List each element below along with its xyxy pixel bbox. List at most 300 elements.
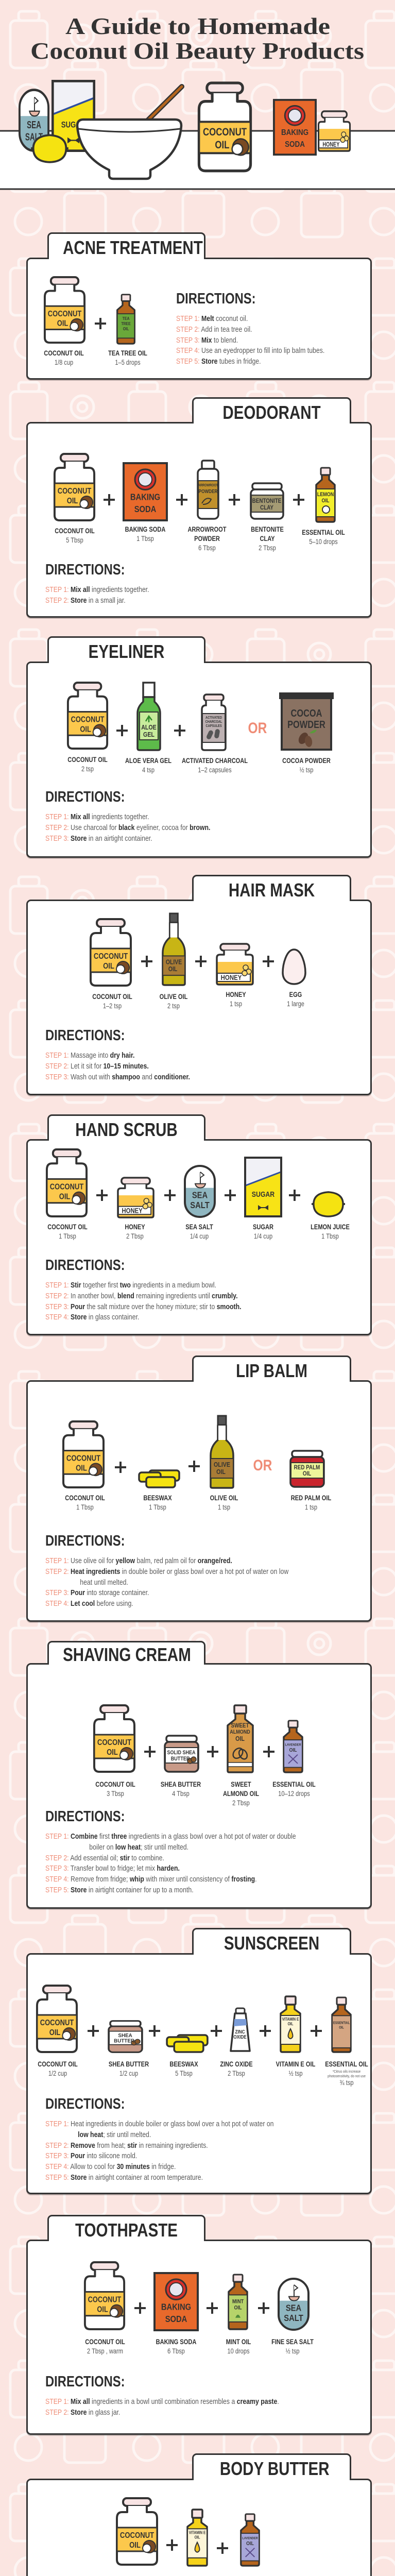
label: bentonite clay: 2 Tbsp bbox=[259, 544, 276, 552]
label: honey: 1 tsp bbox=[230, 1000, 242, 1008]
icon: shea butter: BUTTER bbox=[171, 1756, 190, 1762]
icon: sweet almond oil: SWEET bbox=[231, 1722, 249, 1729]
directions: low heat; stir until melted. bbox=[78, 2130, 151, 2139]
label: coconut oil: 5 Tbsp bbox=[66, 536, 83, 544]
label: coconut oil: COCONUT OIL bbox=[65, 1494, 105, 1502]
icon: coconut oil jar: OIL bbox=[103, 962, 114, 971]
icon: tea tree oil bbox=[116, 294, 135, 345]
icon: sea salt bbox=[19, 89, 49, 152]
icon: coconut oil jar: COCONUT bbox=[48, 310, 81, 318]
icon: sweet almond oil bbox=[226, 1704, 255, 1773]
label: honey: 2 Tbsp bbox=[126, 1232, 144, 1240]
label: arrowroot powder: ARROWROOT bbox=[187, 526, 227, 533]
icon: vitamin e oil: OIL bbox=[195, 2535, 200, 2540]
directions: STEP 4: Use an eyedropper to fill into lip balm tubes. bbox=[176, 346, 324, 355]
icon: sugar: SUGAR bbox=[252, 1190, 274, 1198]
label: red palm oil: 1 tsp bbox=[305, 1503, 317, 1511]
plus bbox=[141, 956, 152, 967]
label: coconut oil: COCONUT OIL bbox=[92, 993, 132, 1001]
label: coconut oil: 2 tsp bbox=[81, 765, 94, 773]
plus bbox=[258, 2302, 269, 2314]
icon: olive oil: OLIVE bbox=[214, 1461, 230, 1468]
icon: red palm oil: OIL bbox=[303, 1470, 311, 1477]
directions: STEP 2: In another bowl, blend remaining ingredients until crumbly. bbox=[45, 1292, 238, 1300]
panel: lip balm bbox=[0, 1355, 395, 1622]
directions: STEP 3: Pour into storage container. bbox=[45, 1588, 149, 1597]
icon: beeswax bbox=[164, 2033, 211, 2053]
directions: DIRECTIONS: bbox=[45, 1257, 125, 1274]
icon: spoon bbox=[135, 87, 182, 133]
icon: red palm oil: RED PALM bbox=[294, 1464, 320, 1471]
icon: bentonite clay: CLAY bbox=[260, 504, 274, 511]
tab heading: eyeliner: EYELINER bbox=[89, 641, 164, 662]
icon: vitamin e oil: OIL bbox=[288, 2021, 294, 2026]
directions bbox=[45, 789, 210, 843]
label: coconut oil: 1 Tbsp bbox=[76, 1503, 94, 1511]
icon: aloe vera gel: GEL bbox=[143, 731, 154, 738]
plus bbox=[174, 725, 185, 736]
icon: coconut oil jar bbox=[61, 1420, 106, 1489]
icon: honey bbox=[317, 110, 351, 152]
plus bbox=[195, 956, 207, 967]
icon: lemon bbox=[31, 134, 68, 163]
icon: sea salt: SALT bbox=[25, 131, 43, 143]
directions: STEP 5: Store tubes in fridge. bbox=[176, 357, 261, 366]
directions: STEP 3: Transfer bowl to fridge; let mix harden. bbox=[45, 1864, 180, 1873]
icon: sweet almond oil: OIL bbox=[235, 1735, 245, 1742]
tab heading: toothpaste: TOOTHPASTE bbox=[75, 2219, 178, 2241]
label: olive oil bbox=[160, 992, 187, 1011]
label: sea salt bbox=[185, 1223, 213, 1241]
icon: sugar: SUGAR bbox=[61, 120, 85, 130]
directions bbox=[45, 562, 149, 605]
directions: boiler on low heat; stir until melted. bbox=[89, 1843, 188, 1852]
icon: honey bbox=[216, 943, 254, 986]
icon: zinc oxide: OXIDE bbox=[233, 2034, 247, 2040]
label: coconut oil bbox=[38, 2060, 78, 2078]
label: shea butter bbox=[109, 2060, 149, 2078]
directions: STEP 2: Add in tea tree oil. bbox=[176, 325, 252, 334]
icon: red palm oil bbox=[289, 1449, 325, 1488]
label: baking soda bbox=[125, 526, 165, 543]
label: coconut oil bbox=[47, 1223, 88, 1241]
tab heading: deodorant: DEODORANT bbox=[222, 402, 321, 423]
icon: coconut oil jar bbox=[54, 453, 96, 521]
plus bbox=[96, 1190, 108, 1201]
icon: lemon essential oil: LEMON bbox=[317, 492, 334, 498]
label: tea tree oil bbox=[108, 349, 147, 366]
tab heading: deodorant bbox=[192, 397, 351, 423]
icon: vitamin e oil bbox=[185, 2508, 210, 2567]
panel: deodorant bbox=[26, 397, 372, 619]
directions: STEP 5: Store in airtight container for up to a month. bbox=[45, 1886, 194, 1894]
icon: shea butter: SHEA bbox=[118, 2033, 132, 2039]
plus bbox=[149, 2025, 160, 2037]
label: bentonite clay: CLAY bbox=[260, 535, 275, 543]
icon: tea tree oil: TREE bbox=[121, 321, 131, 326]
icon: bentonite clay: BENTONITE bbox=[252, 498, 281, 504]
label: tea tree oil: TEA TREE OIL bbox=[108, 349, 147, 357]
label: beeswax: 5 Tbsp bbox=[175, 2070, 193, 2077]
directions: STEP 4: Allow to cool for 30 minutes in fridge. bbox=[45, 2162, 176, 2171]
label: sweet almond oil bbox=[223, 1780, 259, 1808]
tab heading: hand scrub bbox=[47, 1114, 205, 1141]
icon: coconut oil jar: COCONUT bbox=[66, 1454, 100, 1463]
label: shea butter: SHEA BUTTER bbox=[161, 1781, 201, 1788]
tab heading: body butter bbox=[192, 2453, 351, 2480]
icon: sugar bbox=[244, 1157, 282, 1217]
icon: arrowroot powder: ARROWROOT bbox=[198, 484, 218, 487]
plus bbox=[95, 318, 106, 329]
icon: cocoa powder: COCOA bbox=[291, 707, 322, 719]
directions: STEP 2: Store in glass jar. bbox=[45, 2408, 120, 2417]
panel: shaving cream bbox=[0, 1641, 395, 1909]
icon: coconut oil jar: OIL bbox=[107, 1748, 118, 1757]
plus bbox=[116, 725, 128, 736]
icon: coconut oil jar: OIL bbox=[49, 2028, 60, 2037]
label: mint oil: MINT OIL bbox=[226, 2338, 251, 2346]
label: zinc oxide: 2 Tbsp bbox=[228, 2070, 245, 2077]
label: beeswax: BEESWAX bbox=[143, 1494, 172, 1502]
label: essential oil with note: *Citrus oils increase bbox=[333, 2069, 360, 2074]
icon: vitamin e oil bbox=[278, 1995, 303, 2053]
label: olive oil: 1 tsp bbox=[218, 1503, 230, 1511]
header: title and kitchen counter illustration bbox=[0, 13, 395, 190]
label: baking soda: 6 Tbsp bbox=[167, 2347, 185, 2355]
plus bbox=[176, 494, 187, 505]
label: arrowroot powder: POWDER bbox=[194, 535, 220, 543]
directions: STEP 4: Let cool before using. bbox=[45, 1599, 133, 1608]
label: essential oil with note: ¾ tsp bbox=[339, 2079, 354, 2087]
label: coconut oil bbox=[44, 349, 84, 366]
icon: coconut oil jar bbox=[44, 1148, 89, 1218]
icon: honey bbox=[116, 1176, 156, 1218]
icon: coconut oil jar: COCONUT bbox=[97, 1738, 131, 1747]
label: baking soda: BAKING SODA bbox=[156, 2338, 196, 2346]
icon: honey: HONEY bbox=[221, 973, 242, 981]
icon: aloe vera gel bbox=[136, 682, 161, 751]
icon: coconut oil jar: OIL bbox=[97, 2305, 108, 2314]
icon: shea butter: SOLID SHEA bbox=[167, 1750, 196, 1756]
icon: shea butter bbox=[107, 2020, 144, 2054]
directions: STEP 1: Mix all ingredients in a bowl until combination resembles a creamy paste. bbox=[45, 2397, 279, 2406]
icon: lavender essential oil: LAVENDER bbox=[285, 1743, 301, 1747]
plus bbox=[188, 1461, 200, 1472]
label: coconut oil: COCONUT OIL bbox=[95, 1781, 135, 1788]
label: zinc oxide: ZINC OXIDE bbox=[220, 2060, 253, 2068]
directions: heat until melted. bbox=[80, 1578, 128, 1587]
label: bentonite clay bbox=[251, 526, 284, 552]
directions: STEP 1: Stir together first two ingredients in a medium bowl. bbox=[45, 1281, 216, 1290]
icon: coconut oil jar bbox=[43, 276, 85, 344]
directions: STEP 2: Heat ingredients in double boiler or glass bowl over a hot pot of water on low bbox=[45, 1567, 288, 1576]
icon: coconut oil jar: OIL bbox=[215, 139, 230, 151]
label: aloe vera gel: 4 tsp bbox=[142, 766, 154, 774]
icon: olive oil bbox=[209, 1414, 235, 1489]
icon: sea salt bbox=[183, 1164, 216, 1218]
plus bbox=[166, 2539, 178, 2551]
icon: mint oil: MINT bbox=[232, 2299, 244, 2305]
directions: DIRECTIONS: bbox=[45, 2096, 125, 2112]
icon: lavender essential oil: OIL bbox=[289, 1747, 297, 1753]
label: coconut oil: COCONUT OIL bbox=[67, 756, 108, 764]
directions: STEP 2: Add essential oil; stir to combine. bbox=[45, 1854, 164, 1862]
label: activated charcoal: 1–2 capsules bbox=[198, 766, 232, 774]
directions: STEP 1: Massage into dry hair. bbox=[45, 1051, 134, 1060]
plus bbox=[229, 494, 240, 505]
directions: STEP 3: Pour the salt mixture over the honey mixture; stir to smooth. bbox=[45, 1302, 242, 1311]
directions: DIRECTIONS: bbox=[45, 2374, 125, 2390]
icon: essential oil: OIL bbox=[339, 2026, 344, 2030]
label: red palm oil bbox=[291, 1494, 331, 1512]
label: cocoa powder: ½ tsp bbox=[299, 766, 314, 774]
icon: sugar bbox=[51, 80, 95, 152]
directions bbox=[45, 1533, 288, 1609]
icon: olive oil bbox=[162, 913, 186, 986]
directions: STEP 4: Remove from fridge; whip with mixer until consistency of frosting. bbox=[45, 1875, 257, 1884]
label: coconut oil: 1–2 tsp bbox=[103, 1002, 122, 1010]
directions: STEP 3: Pour into silicone mold. bbox=[45, 2151, 137, 2160]
label: arrowroot powder: 6 Tbsp bbox=[198, 544, 216, 552]
label: coconut oil: 3 Tbsp bbox=[107, 1790, 124, 1798]
icon: sea salt: SALT bbox=[190, 1200, 210, 1211]
label: vitamin e oil: VITAMIN E OIL bbox=[276, 2060, 315, 2068]
tab heading: shaving cream: SHAVING CREAM bbox=[63, 1644, 191, 1665]
label: coconut oil bbox=[65, 1494, 105, 1512]
directions: DIRECTIONS: bbox=[176, 291, 256, 307]
icon: mixing bowl bbox=[77, 120, 181, 179]
plus bbox=[217, 2543, 228, 2554]
label: activated charcoal bbox=[182, 757, 248, 774]
icon: activated charcoal bbox=[201, 693, 227, 751]
panel: eyeliner bbox=[26, 636, 372, 859]
directions: STEP 2: Let it sit for 10–15 minutes. bbox=[45, 1062, 149, 1071]
plus bbox=[293, 494, 304, 505]
icon: olive oil: OIL bbox=[216, 1468, 226, 1476]
label: coconut oil: 1 Tbsp bbox=[59, 1232, 76, 1240]
icon: essential oil: ESSENTIAL bbox=[333, 2021, 350, 2025]
icon: coconut oil jar: OIL bbox=[67, 497, 78, 505]
icon: coconut oil jar: OIL bbox=[57, 319, 68, 328]
tab heading: toothpaste bbox=[47, 2215, 205, 2241]
label: sea salt: SEA SALT bbox=[185, 1223, 213, 1231]
label: mint oil bbox=[226, 2337, 251, 2356]
label: beeswax bbox=[169, 2060, 198, 2078]
label: essential oil bbox=[272, 1780, 316, 1799]
icon: fine sea salt bbox=[277, 2277, 310, 2331]
icon: fine sea salt: SEA bbox=[286, 2303, 301, 2313]
icon: coconut oil jar: COCONUT bbox=[120, 2531, 154, 2540]
label: lemon juice bbox=[311, 1223, 350, 1241]
label: beeswax: BEESWAX bbox=[169, 2060, 198, 2068]
label: essential oil with note bbox=[325, 2060, 368, 2088]
panel: sunscreen bbox=[0, 1928, 395, 2194]
panel: body butter bbox=[0, 2453, 395, 2576]
icon: tea tree oil: OIL bbox=[123, 326, 129, 331]
icon: activated charcoal: ACTIVATED bbox=[205, 716, 222, 720]
tab heading: lip balm: LIP BALM bbox=[236, 1360, 307, 1381]
directions: DIRECTIONS: bbox=[45, 1808, 125, 1825]
icon: baking soda bbox=[153, 2272, 199, 2331]
plus bbox=[164, 1190, 176, 1201]
label: egg: EGG bbox=[289, 991, 302, 998]
icon: arrowroot powder bbox=[197, 460, 219, 520]
icon: activated charcoal: CHARCOAL bbox=[205, 720, 222, 724]
directions: STEP 1: Mix all ingredients together. bbox=[45, 585, 149, 594]
label: beeswax bbox=[143, 1494, 172, 1512]
directions: STEP 1: Combine first three ingredients in a glass bowl over a hot pot of water or double bbox=[45, 1832, 296, 1841]
directions: STEP 3: Wash out with shampoo and conditioner. bbox=[45, 1073, 190, 1081]
label: shea butter bbox=[161, 1780, 201, 1799]
label: olive oil bbox=[210, 1494, 238, 1512]
label: coconut oil: 2 Tbsp , warm bbox=[87, 2347, 123, 2355]
icon: coconut oil jar bbox=[82, 2261, 127, 2331]
label: aloe vera gel bbox=[125, 757, 171, 774]
icon: lavender essential oil bbox=[238, 2513, 262, 2567]
label: vitamin e oil: ½ tsp bbox=[288, 2070, 303, 2077]
label: bentonite clay: BENTONITE bbox=[251, 526, 284, 533]
icon: coconut oil jar: OIL bbox=[59, 1193, 70, 1201]
icon: zinc oxide: ZINC bbox=[235, 2029, 245, 2035]
icon: lemon essential oil bbox=[315, 467, 336, 523]
label: shea butter: 4 Tbsp bbox=[172, 1790, 190, 1798]
label: sugar: 1/4 cup bbox=[254, 1232, 272, 1240]
tab heading: sunscreen bbox=[192, 1928, 351, 1955]
label: tea tree oil: 1–5 drops bbox=[115, 359, 141, 366]
icon: baking soda: SODA bbox=[285, 140, 305, 149]
panel: acne treatment bbox=[26, 232, 372, 381]
plus bbox=[311, 2025, 322, 2037]
label: lemon juice: LEMON JUICE bbox=[311, 1223, 350, 1231]
plus bbox=[260, 2025, 271, 2037]
plus bbox=[211, 2025, 222, 2037]
icon: coconut oil jar: COCONUT bbox=[94, 952, 128, 961]
label: fine sea salt: FINE SEA SALT bbox=[271, 2338, 314, 2346]
label: coconut oil bbox=[95, 1780, 135, 1799]
label: sweet almond oil: ALMOND OIL bbox=[223, 1790, 259, 1798]
plus bbox=[289, 1190, 300, 1201]
icon: cocoa powder bbox=[279, 692, 334, 751]
label: essential oil bbox=[302, 529, 345, 546]
label: coconut oil bbox=[67, 756, 108, 773]
icon: aloe vera gel: ALOE bbox=[141, 723, 157, 731]
icon: coconut oil jar bbox=[92, 1704, 137, 1774]
plus bbox=[104, 494, 115, 505]
label: olive oil: OLIVE OIL bbox=[210, 1494, 238, 1502]
icon: sea salt: SEA bbox=[27, 119, 41, 131]
directions: DIRECTIONS: bbox=[45, 1533, 125, 1549]
label: sugar: SUGAR bbox=[253, 1223, 273, 1231]
icon: arrowroot powder: POWDER bbox=[199, 488, 218, 494]
counter shelf bbox=[0, 131, 395, 189]
label: sweet almond oil: 2 Tbsp bbox=[232, 1799, 250, 1807]
label: zinc oxide bbox=[220, 2060, 253, 2078]
tab heading: hair mask bbox=[192, 875, 351, 901]
icon: lemon essential oil: OIL bbox=[321, 498, 330, 504]
icon: zinc oxide bbox=[229, 2007, 252, 2053]
label: sweet almond oil: SWEET bbox=[231, 1781, 251, 1788]
icon: coconut oil jar bbox=[114, 2497, 160, 2567]
label: coconut oil: COCONUT OIL bbox=[44, 349, 84, 357]
label: coconut oil: 1/2 cup bbox=[48, 2070, 67, 2077]
icon: coconut oil jar: OIL bbox=[129, 2541, 141, 2550]
label: honey: HONEY bbox=[125, 1223, 145, 1231]
icon: tea tree oil: TEA bbox=[123, 316, 130, 321]
label: fine sea salt: ½ tsp bbox=[285, 2347, 300, 2355]
label: coconut oil: COCONUT OIL bbox=[47, 1223, 88, 1231]
label: coconut oil: 1/8 cup bbox=[55, 359, 73, 366]
icon: coconut oil jar: COCONUT bbox=[50, 1182, 83, 1192]
label: cocoa powder bbox=[282, 757, 331, 774]
icon: fine sea salt: SALT bbox=[284, 2313, 303, 2324]
icon: lavender essential oil bbox=[281, 1719, 305, 1773]
directions bbox=[45, 2374, 279, 2418]
icon: baking soda: SODA bbox=[165, 2314, 187, 2325]
icon: coconut oil jar: COCONUT bbox=[203, 126, 247, 138]
label: coconut oil: COCONUT OIL bbox=[55, 527, 95, 535]
label: essential oil: 10–12 drops bbox=[278, 1790, 310, 1798]
icon: activated charcoal: CAPSULES bbox=[205, 724, 222, 728]
icon: coconut oil jar bbox=[35, 1984, 79, 2054]
tab heading: shaving cream bbox=[47, 1641, 205, 1665]
tab heading: lip balm bbox=[192, 1355, 351, 1382]
label: egg: 1 large bbox=[287, 1000, 304, 1008]
directions: DIRECTIONS: bbox=[45, 562, 125, 578]
title: A Guide to Homemade bbox=[65, 13, 330, 39]
icon: honey: HONEY bbox=[122, 1207, 143, 1215]
label: red palm oil: RED PALM OIL bbox=[291, 1494, 331, 1502]
icon: coconut oil jar bbox=[67, 682, 108, 750]
tab heading: acne treatment bbox=[47, 232, 205, 259]
icon: coconut oil jar: OIL bbox=[80, 725, 91, 734]
directions bbox=[45, 1809, 296, 1896]
label: shea butter: 1/2 cup bbox=[119, 2070, 138, 2077]
directions: STEP 4: Store in glass container. bbox=[45, 1313, 139, 1321]
icon: coconut oil jar bbox=[90, 918, 132, 987]
icon: cocoa powder: POWDER bbox=[287, 718, 325, 730]
label: essential oil: ESSENTIAL OIL bbox=[302, 529, 345, 536]
icon: shea butter bbox=[163, 1734, 200, 1773]
plus bbox=[263, 1746, 274, 1757]
directions: STEP 1: Heat ingredients in double boiler or glass bowl over a hot pot of water on bbox=[45, 2120, 274, 2128]
plus bbox=[144, 1746, 156, 1757]
icon: coconut oil jar: COCONUT bbox=[71, 715, 105, 724]
plus bbox=[207, 1746, 218, 1757]
plus bbox=[225, 1190, 236, 1201]
label: shea butter: SHEA BUTTER bbox=[109, 2060, 149, 2068]
tab heading: hand scrub: HAND SCRUB bbox=[75, 1119, 178, 1140]
label: essential oil with note: ESSENTIAL OIL bbox=[325, 2060, 368, 2068]
icon: coconut oil jar: OIL bbox=[76, 1464, 87, 1473]
directions: STEP 1: Mix all ingredients together. bbox=[45, 812, 149, 821]
label: baking soda: 1 Tbsp bbox=[136, 535, 154, 543]
tab heading: acne treatment: ACNE TREATMENT bbox=[63, 237, 203, 258]
directions: STEP 3: Mix to blend. bbox=[176, 336, 238, 345]
icon: shea butter: BUTTER bbox=[114, 2038, 135, 2044]
label: sea salt: 1/4 cup bbox=[190, 1232, 209, 1240]
icon: lavender essential oil: LAVENDER bbox=[242, 2536, 258, 2540]
directions: DIRECTIONS: bbox=[45, 1027, 125, 1044]
or: OR bbox=[253, 1457, 272, 1474]
label: fine sea salt bbox=[271, 2337, 314, 2356]
label: coconut oil: COCONUT OIL bbox=[85, 2338, 125, 2346]
label: baking soda: BAKING SODA bbox=[125, 526, 165, 533]
icon: olive oil: OIL bbox=[168, 965, 177, 973]
panel: toothpaste bbox=[0, 2215, 395, 2435]
label: honey bbox=[226, 990, 246, 1009]
label: egg bbox=[287, 990, 304, 1009]
icon: baking soda: BAKING bbox=[281, 128, 308, 138]
